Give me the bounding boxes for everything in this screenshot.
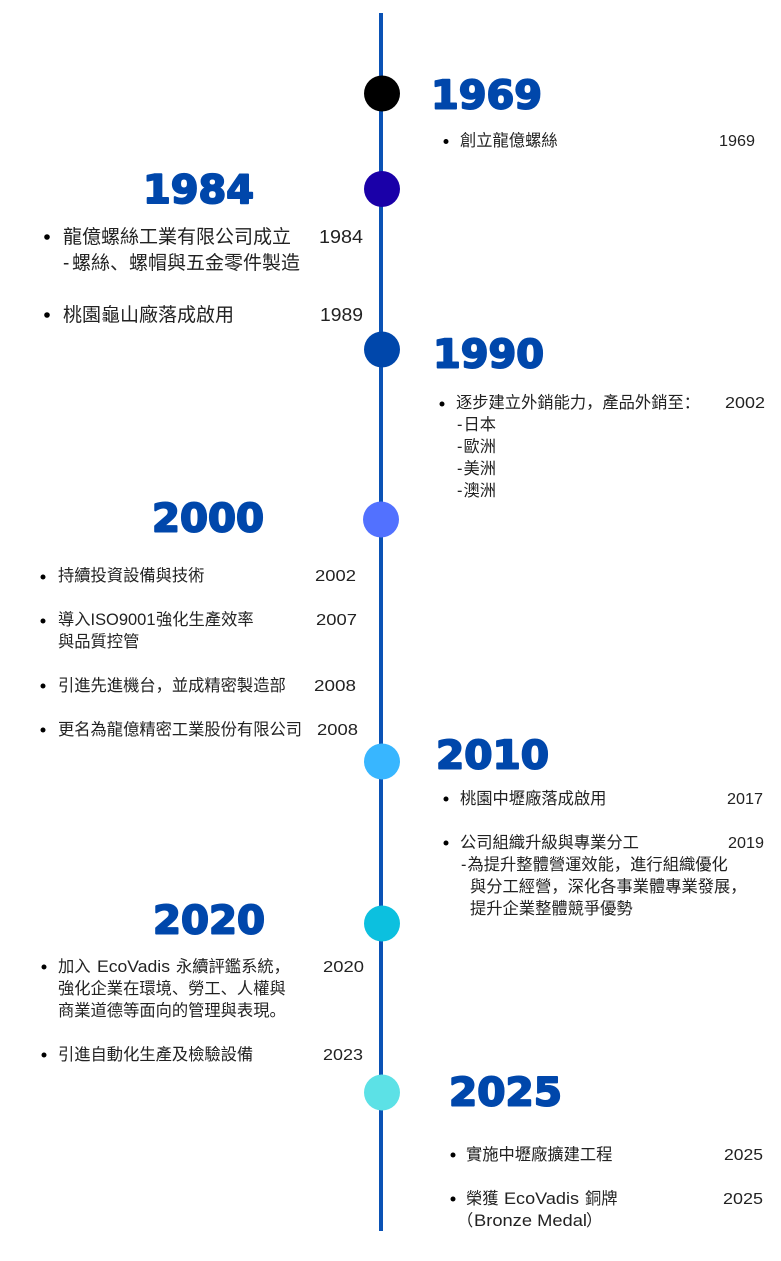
entry: bronze medal: EcoVadis xyxy=(504,1190,579,1208)
entry: ISO9001: ISO9001 xyxy=(90,611,156,629)
entry: organisation upgrade: 公司組織升級與專業分工 xyxy=(460,834,639,852)
panel: 1984 xyxy=(44,168,363,326)
entry: EcoVadis: 2020 xyxy=(323,959,364,976)
panel: 1969 xyxy=(431,74,755,150)
entry: EcoVadis xyxy=(42,958,364,1020)
panel: 2020 xyxy=(42,898,364,1064)
entry: founding: 創立龍億螺絲 xyxy=(460,132,558,150)
milestone dot 1969 xyxy=(364,76,400,112)
entry: renamed: 更名為龍億精密工業股份有限公司 xyxy=(58,721,302,739)
milestone dot 1990 xyxy=(364,332,400,368)
entry: founding: 1969 xyxy=(719,133,755,150)
entry: automation: 2023 xyxy=(323,1047,363,1064)
milestone dot 1984 xyxy=(364,171,400,207)
entry: plant expansion: 實施中壢廠擴建工程 xyxy=(466,1145,612,1164)
entry: ISO9001: 導入 xyxy=(58,610,91,629)
milestone dot 2025 xyxy=(364,1074,400,1110)
milestone dot 2020 xyxy=(364,906,400,942)
heading 2020: 2020 xyxy=(153,898,265,944)
heading 1990: 1990 xyxy=(433,332,544,378)
entry: EcoVadis: EcoVadis xyxy=(97,958,170,976)
entry: EcoVadis: 商業道德等面向的管理與表現。 xyxy=(58,1002,286,1020)
entry: plant expansion: 2025 xyxy=(724,1147,763,1164)
entry: export capability xyxy=(440,394,765,500)
entry: plant expansion xyxy=(450,1145,763,1164)
entry: company established: 龍億螺絲工業有限公司成立 xyxy=(63,226,291,248)
entry: renamed: 2008 xyxy=(317,722,358,739)
entry: export capability: - xyxy=(457,460,462,478)
panel: 2000 xyxy=(40,496,358,739)
entry: export capability: - xyxy=(457,416,462,434)
entry: ISO9001: 與品質控管 xyxy=(58,633,139,651)
entry: export capability: 逐步建立外銷能力，產品外銷至： xyxy=(456,394,700,412)
entry: bronze medal: Bronze Medal xyxy=(474,1212,587,1230)
entry: export capability: 澳洲 xyxy=(464,482,496,500)
entry: bronze medal xyxy=(450,1190,763,1230)
entry: Zhongli plant: 2017 xyxy=(727,791,763,808)
panel: 2010 xyxy=(436,734,764,918)
entry: organisation upgrade xyxy=(444,834,764,918)
entry: export capability: 2002 xyxy=(725,395,765,412)
entry: automation xyxy=(42,1046,363,1064)
entry: bronze medal: （ xyxy=(457,1212,473,1230)
entry: EcoVadis: 永續評鑑系統， xyxy=(176,958,290,976)
entry: continued investment: 2002 xyxy=(315,568,356,585)
entry: continued investment: 持續投資設備與技術 xyxy=(58,567,204,585)
entry: advanced machines: 引進先進機台，並成精密製造部 xyxy=(58,677,286,695)
heading 2025: 2025 xyxy=(449,1070,562,1116)
heading 2010: 2010 xyxy=(436,734,549,778)
panel: 2025 xyxy=(449,1070,763,1230)
entry: company established xyxy=(44,226,363,274)
entry: export capability: 美洲 xyxy=(464,460,496,478)
entry: company established: - xyxy=(63,253,69,274)
entry: bronze medal: 榮獲 xyxy=(466,1190,499,1208)
entry: advanced machines: 2008 xyxy=(314,678,356,695)
entry: organisation upgrade: 與分工經營，深化各事業體專業發展， xyxy=(470,878,747,896)
milestone dot 2010 xyxy=(364,744,400,780)
entry: Zhongli plant: 桃園中壢廠落成啟用 xyxy=(460,789,606,808)
entry: export capability: 日本 xyxy=(464,416,496,434)
entry: company established: 1984 xyxy=(319,227,363,247)
entry: organisation upgrade: 為提升整體營運效能，進行組織優化 xyxy=(468,856,728,874)
entry: bronze medal: ） xyxy=(586,1212,602,1230)
entry: organisation upgrade: 提升企業整體競爭優勢 xyxy=(470,900,633,918)
entry: bronze medal: 2025 xyxy=(723,1191,763,1208)
milestone dot 2000 xyxy=(363,502,399,538)
timeline axis xyxy=(379,13,383,1231)
entry: ISO9001: 強化生產效率 xyxy=(156,611,254,629)
entry: EcoVadis: 強化企業在環境、勞工、人權與 xyxy=(58,979,286,998)
entry: Guishan plant: 桃園龜山廠落成啟用 xyxy=(63,303,234,326)
entry: export capability: - xyxy=(457,438,462,456)
entry: organisation upgrade: 2019 xyxy=(728,835,764,852)
entry: ISO9001: 2007 xyxy=(316,612,357,629)
heading 1969: 1969 xyxy=(431,74,542,118)
entry: EcoVadis: 加入 xyxy=(58,958,91,976)
heading 1984: 1984 xyxy=(143,168,254,213)
entry: continued investment xyxy=(40,567,356,585)
entry: founding xyxy=(444,132,755,150)
entry: organisation upgrade: - xyxy=(461,856,466,874)
entry: export capability: - xyxy=(457,482,462,500)
entry: ISO9001 xyxy=(40,610,357,651)
entry: Guishan plant xyxy=(44,303,363,326)
entry: company established: 螺絲、螺帽與五金零件製造 xyxy=(72,252,300,274)
entry: bronze medal: 銅牌 xyxy=(585,1190,618,1208)
panel: 1990 xyxy=(433,332,765,500)
entry: automation: 引進自動化生產及檢驗設備 xyxy=(58,1046,253,1064)
heading 2000: 2000 xyxy=(152,496,264,542)
entry: Guishan plant: 1989 xyxy=(320,305,363,325)
entry: export capability: 歐洲 xyxy=(464,438,496,456)
entry: Zhongli plant xyxy=(444,789,763,808)
